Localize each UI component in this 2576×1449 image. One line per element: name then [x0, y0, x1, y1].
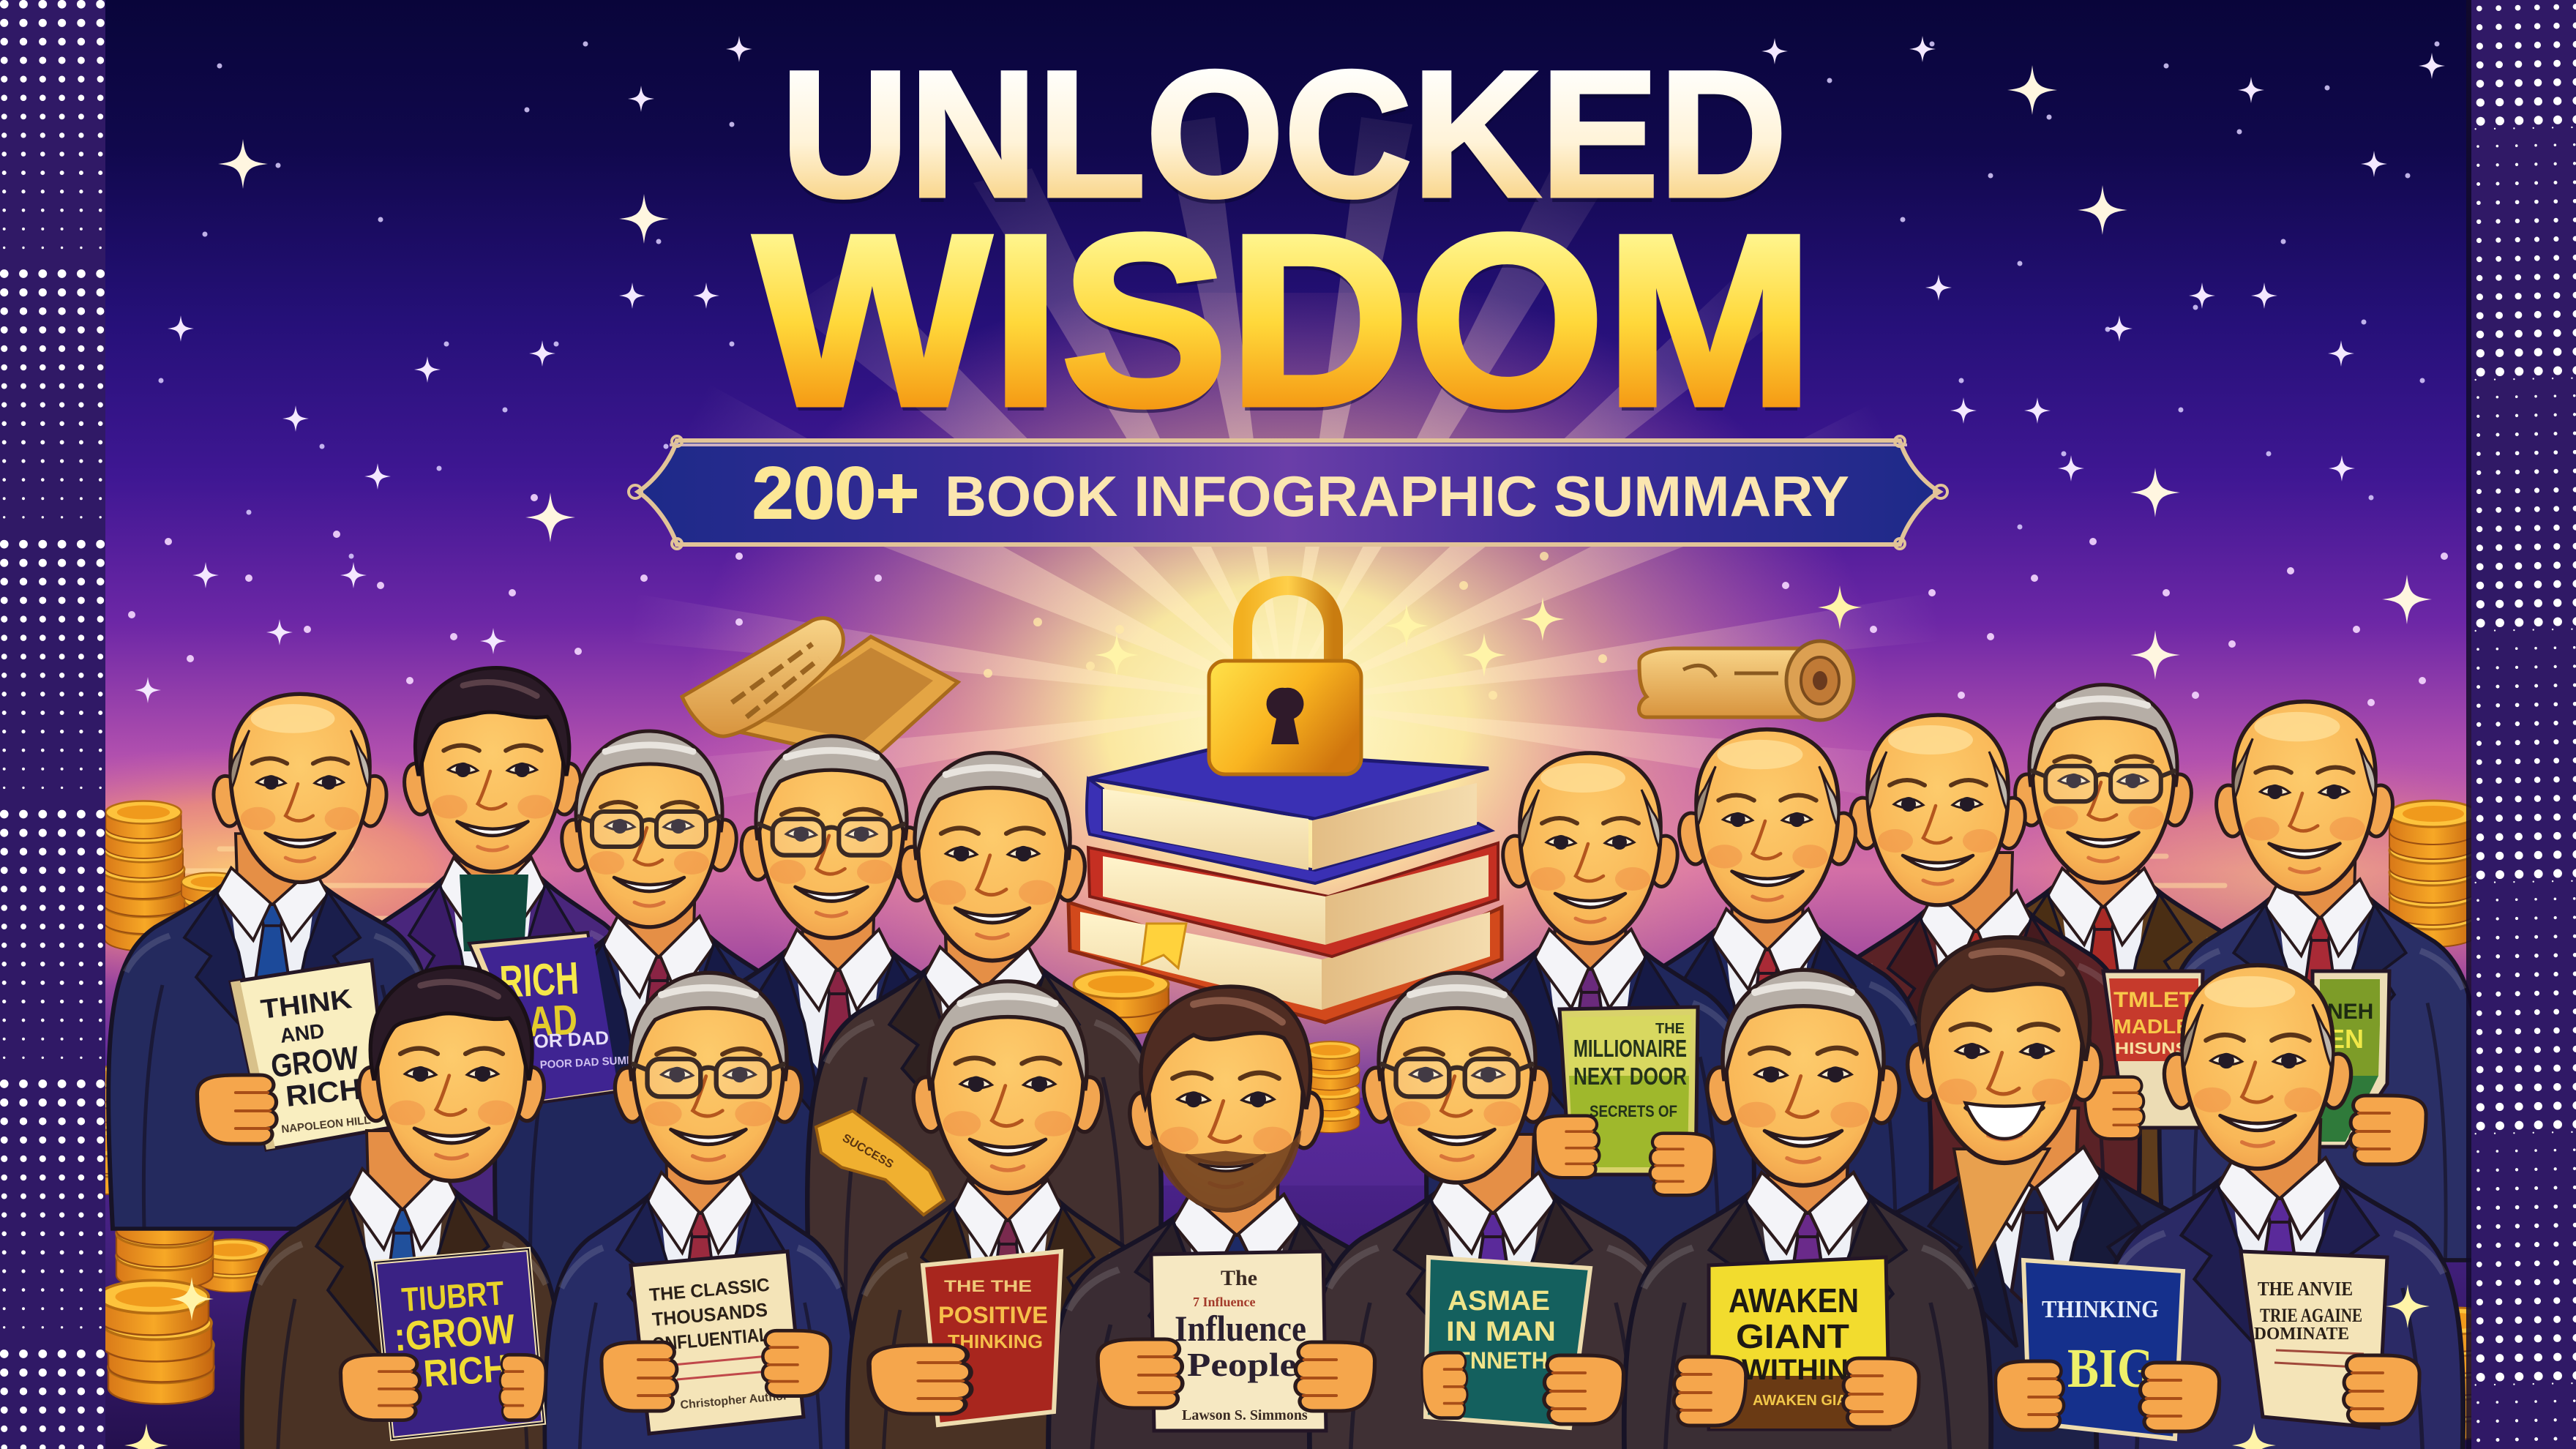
bottom sparkles	[124, 1284, 2430, 1449]
book: red and cream back book: TMLET	[2113, 988, 2194, 1012]
book: green back book	[2313, 971, 2389, 1147]
central coins behind the book stack	[1074, 970, 1360, 1133]
book: Think and Grow Rich, cream cover: NAPOLEON HILL	[281, 1114, 371, 1136]
figure: bald man with purple tie	[1426, 753, 1754, 1322]
figure: man with glasses in brown jacket	[1939, 685, 2267, 1249]
hands	[1422, 1352, 1624, 1424]
title	[754, 34, 1814, 463]
book: Think and Grow Rich, cream cover: THINK	[259, 984, 353, 1025]
book: Awaken the Giant Within: AWAKEN GIANT	[1753, 1393, 1867, 1409]
book: red and cream back book: MADLE	[2113, 1015, 2190, 1038]
book: Thinking Big	[2023, 1260, 2183, 1439]
figure: dark-haired man in purple jacket	[337, 668, 648, 1259]
book: purple Think and Grow Rich	[375, 1249, 544, 1439]
hands	[1098, 1339, 1375, 1411]
book: Awaken the Giant Within: WITHIN	[1742, 1354, 1849, 1386]
golden padlock	[1209, 585, 1361, 774]
hand	[1650, 1134, 1715, 1195]
figure: grey-haired man with glasses	[495, 731, 823, 1317]
panel dark right edge	[2466, 0, 2471, 1449]
book: How to Influence People	[1151, 1251, 1326, 1431]
book: red The Power of Positive Thinking: THE THE	[944, 1277, 1032, 1295]
book: Rich Dad: RICH	[498, 953, 580, 1008]
book: Awaken the Giant Within: GIANT	[1736, 1317, 1849, 1355]
book: cream The Magic of Thinking: DOMINATE	[2254, 1325, 2349, 1344]
book: teal As a Man Thinketh: ASMAE	[1448, 1286, 1550, 1317]
coin stacks: left and right	[66, 801, 2499, 1439]
book: Rich Dad	[469, 932, 659, 1103]
front-row books and hands	[340, 1249, 2419, 1439]
back-row books and hands	[197, 932, 2426, 1195]
figure: bearded man in dark suit	[1049, 986, 1425, 1449]
book: Think and Grow Rich, cream cover: RICH	[284, 1073, 363, 1113]
hands	[1996, 1361, 2220, 1431]
book: cream The Magic of Thinking: TRIE AGAINE	[2260, 1305, 2362, 1326]
small golden key	[816, 1111, 944, 1215]
bookmark ribbon	[1142, 924, 1186, 968]
book: How to Influence People: Lawson S. Simmons	[1182, 1407, 1308, 1423]
figure: grey-haired man with glasses, second	[674, 736, 1002, 1330]
back-row figures	[108, 668, 2480, 1348]
book: Rich Dad: OR DAD	[533, 1027, 610, 1052]
book: The Millionaire Next Door: SECRETS OF	[1590, 1102, 1677, 1120]
book: Awaken the Giant Within: AWAKEN	[1729, 1281, 1859, 1319]
book: The Millionaire Next Door: THE	[1655, 1021, 1685, 1037]
book: Think and Grow Rich, cream cover	[231, 960, 390, 1150]
figure: bald man with purple tie, far right	[2096, 965, 2463, 1449]
scroll: left	[682, 618, 958, 761]
hand	[1535, 1116, 1599, 1177]
book: cream The Classic Thousands: THE CLASSIC	[648, 1275, 771, 1306]
keyhole	[1267, 688, 1303, 744]
book: The Millionaire Next Door: MILLIONAIRE	[1573, 1035, 1687, 1062]
book: teal As a Man Thinketh: IN MAN	[1446, 1317, 1556, 1347]
book: cream The Classic Thousands	[631, 1251, 804, 1434]
book: How to Influence People: People	[1187, 1346, 1297, 1383]
figure: smiling man in navy shirt	[1838, 937, 2231, 1449]
book: purple Think and Grow Rich: :GROW	[392, 1306, 517, 1360]
hands	[1674, 1357, 1919, 1427]
title line: UNLOCKED: UNLOCKED	[781, 34, 1787, 235]
banner text: BOOK INFOGRAPHIC SUMMARY: BOOK INFOGRAPHIC SUMMARY	[945, 464, 1849, 528]
small golden key: SUCCESS	[840, 1132, 896, 1171]
scroll: right	[1639, 641, 1854, 720]
hand	[2351, 1096, 2426, 1164]
book: How to Influence People: 7 Influence	[1193, 1295, 1256, 1309]
hand	[2344, 1355, 2419, 1424]
book: teal As a Man Thinketh	[1426, 1257, 1590, 1428]
hand	[197, 1075, 277, 1144]
figure: smiling man in brown suit	[847, 981, 1168, 1449]
book: cream The Classic Thousands: ONFLUENTIAL	[651, 1323, 770, 1355]
book: Awaken the Giant Within	[1709, 1257, 1890, 1429]
book: red The Power of Positive Thinking: THINKING	[948, 1330, 1043, 1352]
figure: grey-haired man holding Awaken the Giant Within	[1624, 970, 1991, 1449]
banner text: 200+: 200+	[752, 452, 919, 534]
title line: WISDOM: WISDOM	[754, 190, 1814, 463]
title line: UNLOCKED: UNLOCKED	[781, 40, 1787, 241]
book: How to Influence People: Influence	[1175, 1308, 1306, 1349]
figure: balding man in navy, centre right	[1603, 730, 1931, 1310]
book: cream The Magic of Thinking: THE ANVIE	[2258, 1278, 2353, 1300]
book: red The Power of Positive Thinking	[923, 1251, 1061, 1425]
book: purple Think and Grow Rich: RICH	[422, 1347, 510, 1396]
figure: bald man in maroon jacket	[1812, 715, 2140, 1292]
book: Thinking Big: THINKING	[2042, 1296, 2159, 1323]
figure: balding man in navy, far right	[2160, 702, 2480, 1260]
right dotted side strip	[2471, 0, 2576, 1449]
book: red and cream back book: HISUNS	[2115, 1039, 2188, 1057]
book: purple Think and Grow Rich: TIUBRT	[400, 1273, 505, 1319]
book: Think and Grow Rich, cream cover: GROW	[269, 1040, 361, 1085]
book: red The Power of Positive Thinking: POSITIVE	[938, 1302, 1048, 1328]
hands	[340, 1355, 545, 1420]
book: teal As a Man Thinketh: TNNETH	[1456, 1347, 1548, 1374]
figure: dark-haired man in brown jacket, blue tie	[242, 967, 563, 1449]
book: cream The Classic Thousands: Christopher Author	[680, 1390, 788, 1412]
book: cream The Magic of Thinking	[2241, 1251, 2387, 1428]
book: red and cream back book	[2103, 971, 2203, 1128]
stack of three books	[1068, 750, 1502, 1022]
left dotted side strip	[0, 0, 105, 1449]
book: Thinking Big: BIG	[2067, 1338, 2154, 1399]
figure: grey-haired man with glasses, red tie	[544, 973, 856, 1449]
figure: bald man with Think and Grow Rich	[108, 694, 436, 1229]
figure: man with black glasses, purple tie	[1309, 973, 1677, 1449]
front-row figures	[242, 937, 2463, 1449]
book: The Millionaire Next Door	[1560, 1007, 1698, 1175]
book: Rich Dad: POOR DAD SUMMARY	[539, 1053, 659, 1071]
book: Think and Grow Rich, cream cover: AND	[279, 1019, 326, 1047]
book: green back book: EN	[2327, 1024, 2364, 1054]
subtitle banner	[629, 436, 1947, 549]
figure: grey-haired man in brown suit	[807, 753, 1161, 1348]
title line: WISDOM: WISDOM	[754, 184, 1814, 457]
book: green back book: NEH	[2327, 1000, 2373, 1024]
book: Rich Dad: DAD	[503, 996, 579, 1047]
book: The Millionaire Next Door: NEXT DOOR	[1573, 1063, 1687, 1090]
book: cream The Classic Thousands: THOUSANDS	[651, 1298, 768, 1330]
hands	[602, 1330, 831, 1411]
book: How to Influence People: The	[1221, 1266, 1257, 1290]
hand	[2085, 1077, 2144, 1139]
hand	[869, 1345, 971, 1414]
